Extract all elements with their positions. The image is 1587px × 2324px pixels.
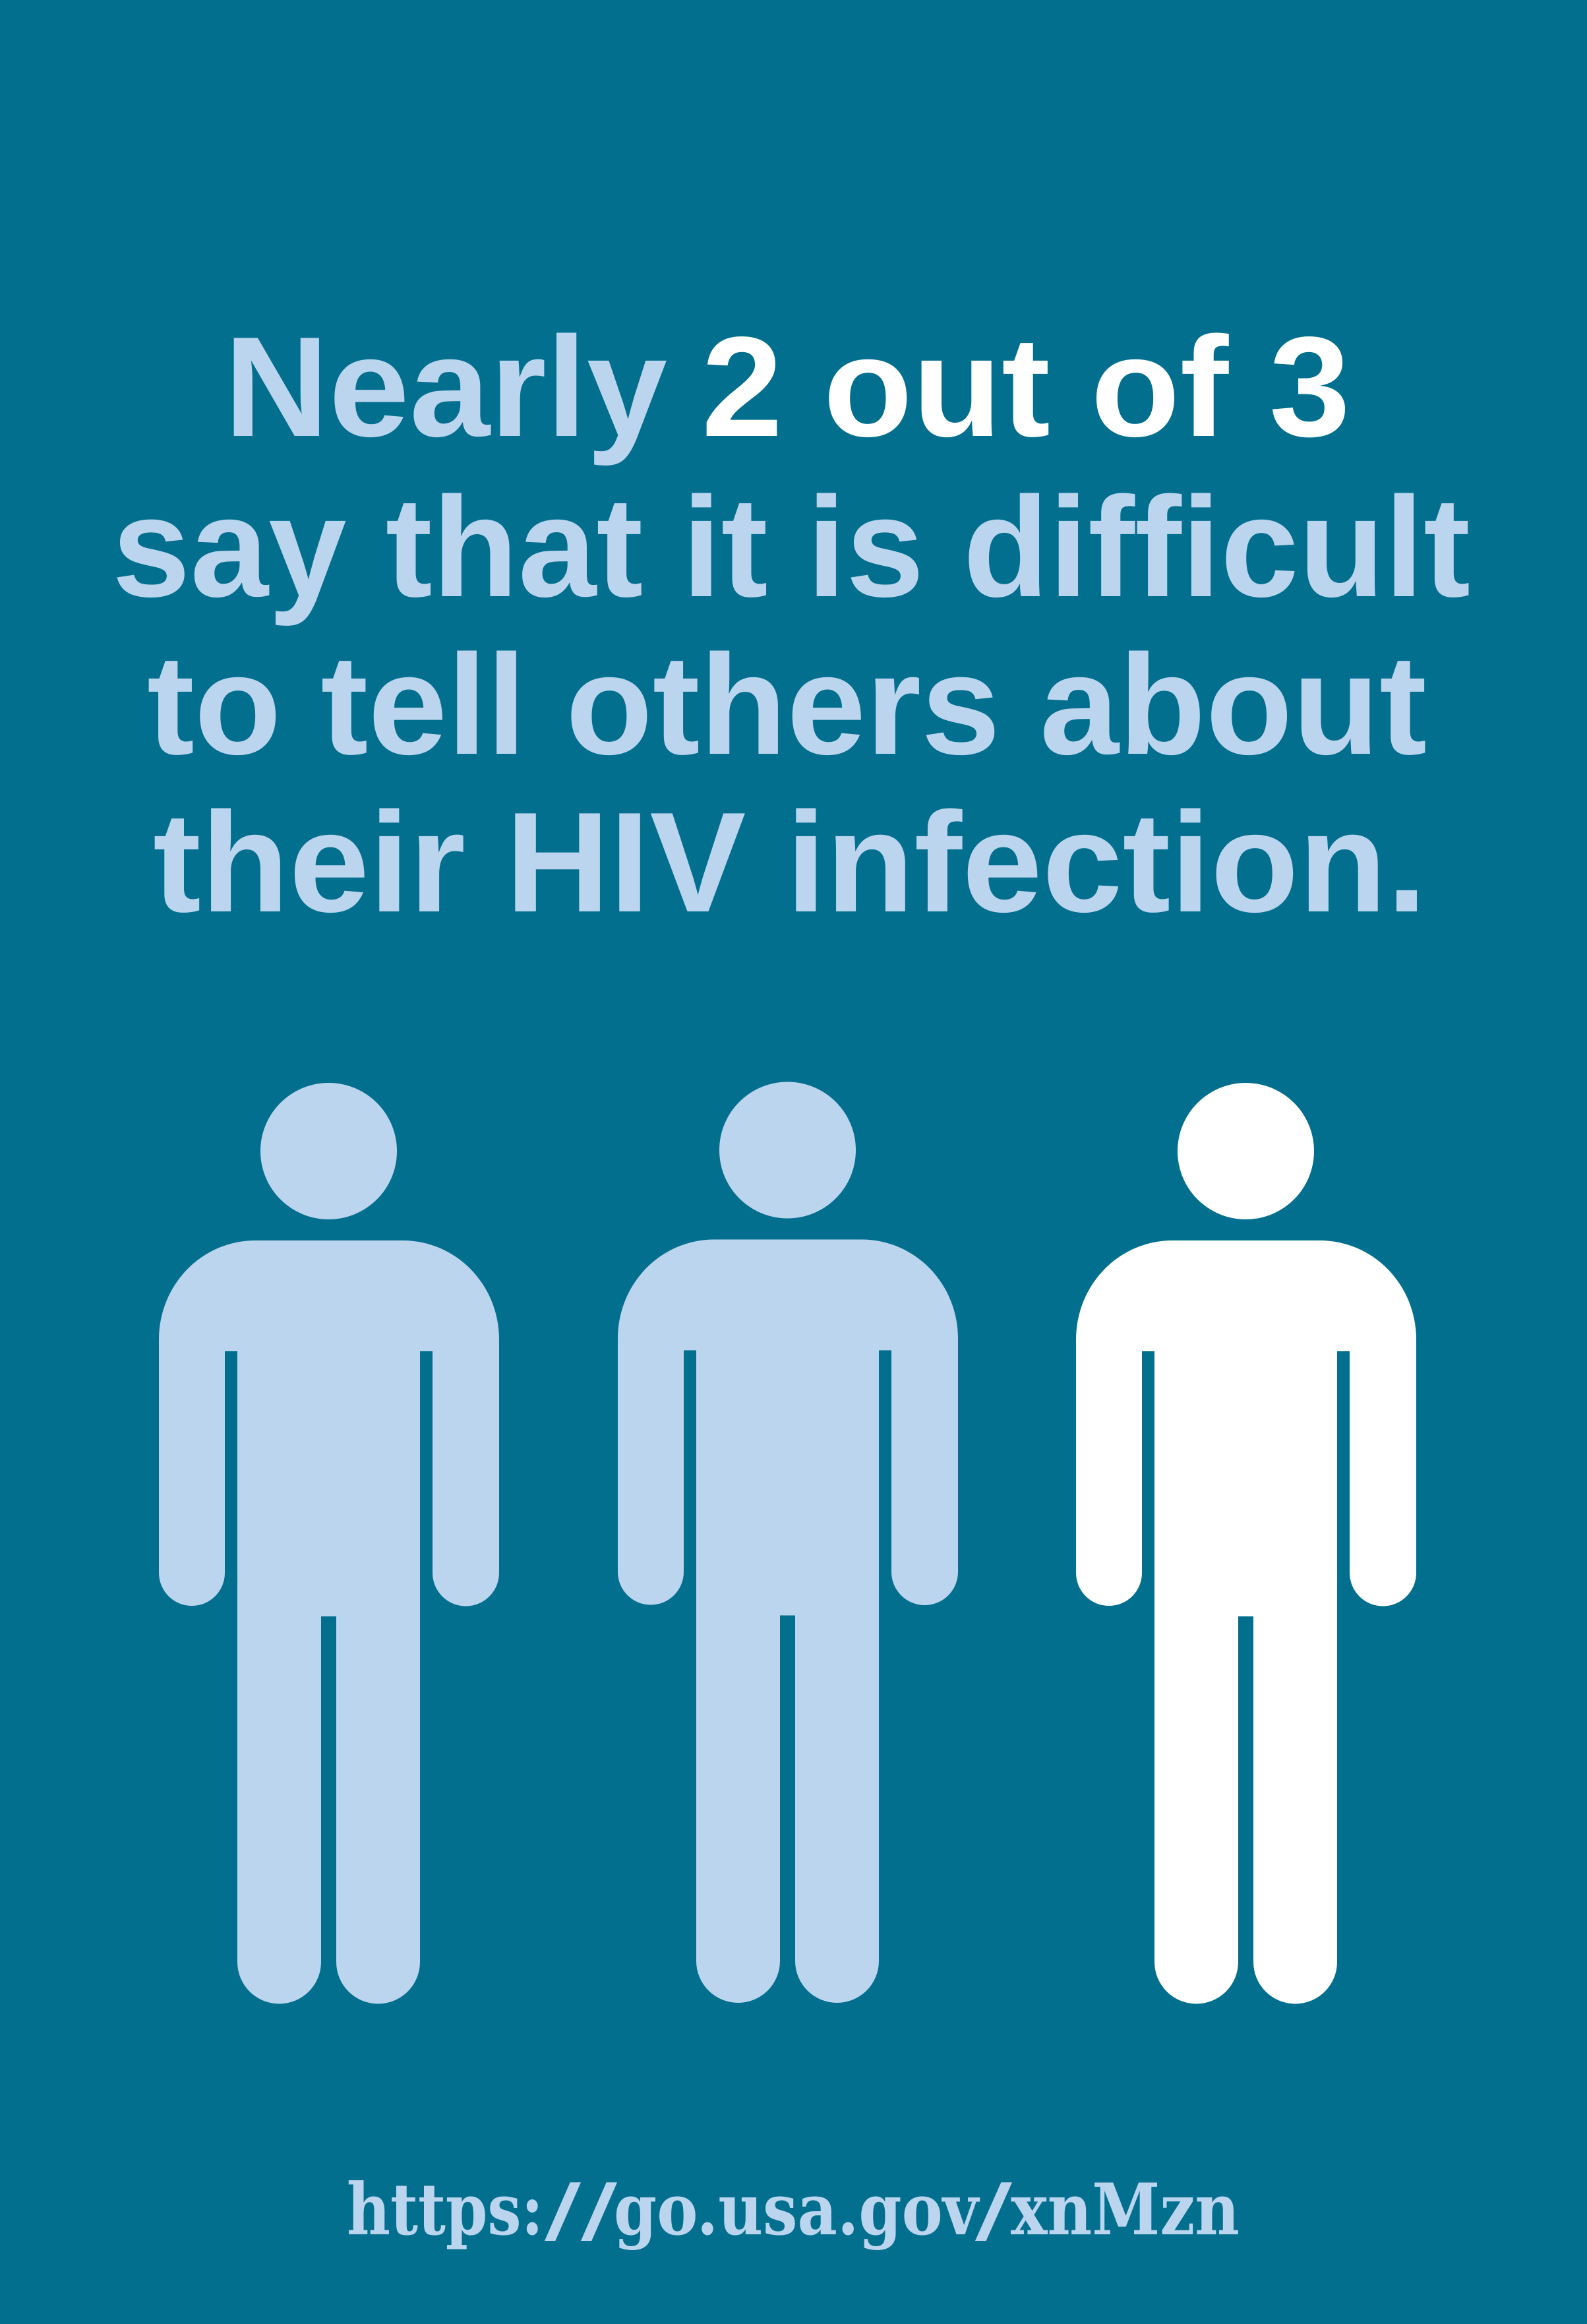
source link text: xnMzn	[1011, 2168, 1240, 2251]
source link text	[347, 2168, 1240, 2251]
source link text: go.usa.gov	[614, 2168, 980, 2251]
title line 1: Nearly: Nearly	[224, 307, 667, 466]
source link text: /	[975, 2168, 1013, 2251]
icon: person 3 (white)	[1076, 1083, 1416, 2003]
icon row: three people, two highlighted in light blue, one in white	[159, 1082, 1416, 2003]
title line 4: their HIV infection.	[153, 782, 1427, 942]
icon: person 2 (light blue)	[618, 1082, 958, 2003]
title line 2: say that it is difficult	[112, 467, 1470, 627]
title line 3: to tell others about	[147, 625, 1427, 784]
title line 1 highlight: 2 out of 3: 2 out of 3	[702, 307, 1350, 466]
title	[112, 307, 1470, 942]
icon: person 1 (light blue)	[159, 1083, 499, 2003]
source link text: //	[545, 2168, 618, 2251]
source link text: https:	[347, 2168, 543, 2251]
